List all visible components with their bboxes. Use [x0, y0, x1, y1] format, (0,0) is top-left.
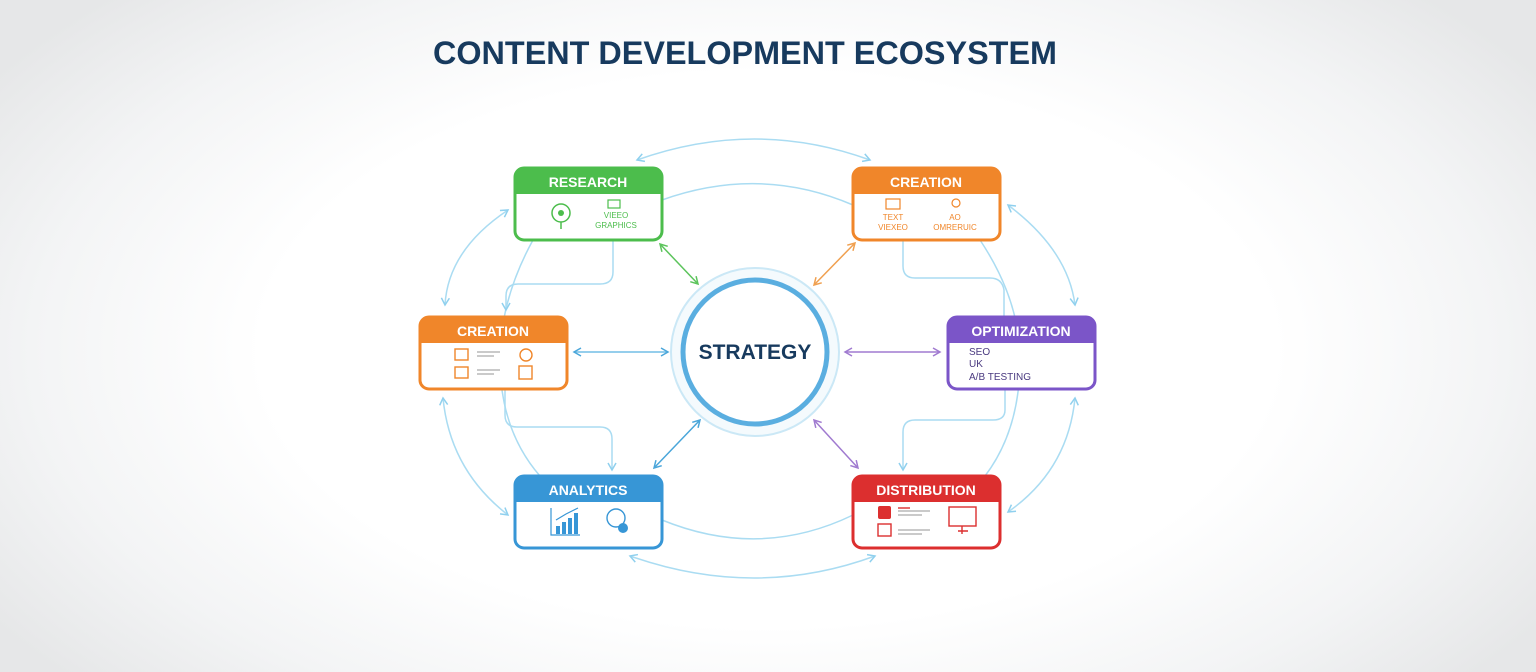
card: creation right: VIEXEO — [878, 223, 908, 232]
card: optimization: A/B TESTING — [969, 372, 1031, 383]
card: creation right: AO — [949, 213, 961, 222]
card: creation right: OMRERUIC — [933, 223, 977, 232]
strategy hub — [671, 268, 839, 436]
arrows to strategy — [574, 243, 940, 468]
card: research — [515, 168, 662, 240]
card: distribution — [853, 476, 1000, 548]
card: optimization — [948, 317, 1095, 389]
card: optimization: SEO — [969, 347, 990, 358]
card: research: RESEARCH — [549, 174, 627, 190]
card: analytics — [515, 476, 662, 548]
card: creation left — [420, 317, 567, 389]
outer connector arcs — [443, 139, 1075, 578]
card: creation left: CREATION — [457, 323, 529, 339]
card: research: GRAPHICS — [595, 221, 637, 230]
card: analytics: ANALYTICS — [549, 482, 627, 498]
card: distribution: DISTRIBUTION — [876, 482, 976, 498]
card: creation right: CREATION — [890, 174, 962, 190]
card: optimization: OPTIMIZATION — [971, 323, 1071, 339]
title: CONTENT DEVELOPMENT ECOSYSTEM — [433, 35, 1057, 71]
card: creation right: TEXT — [883, 213, 903, 222]
card: optimization: UK — [969, 359, 983, 370]
card: research: VIEEO — [604, 211, 628, 220]
card: creation right — [853, 168, 1000, 240]
strategy hub: STRATEGY — [699, 341, 811, 364]
